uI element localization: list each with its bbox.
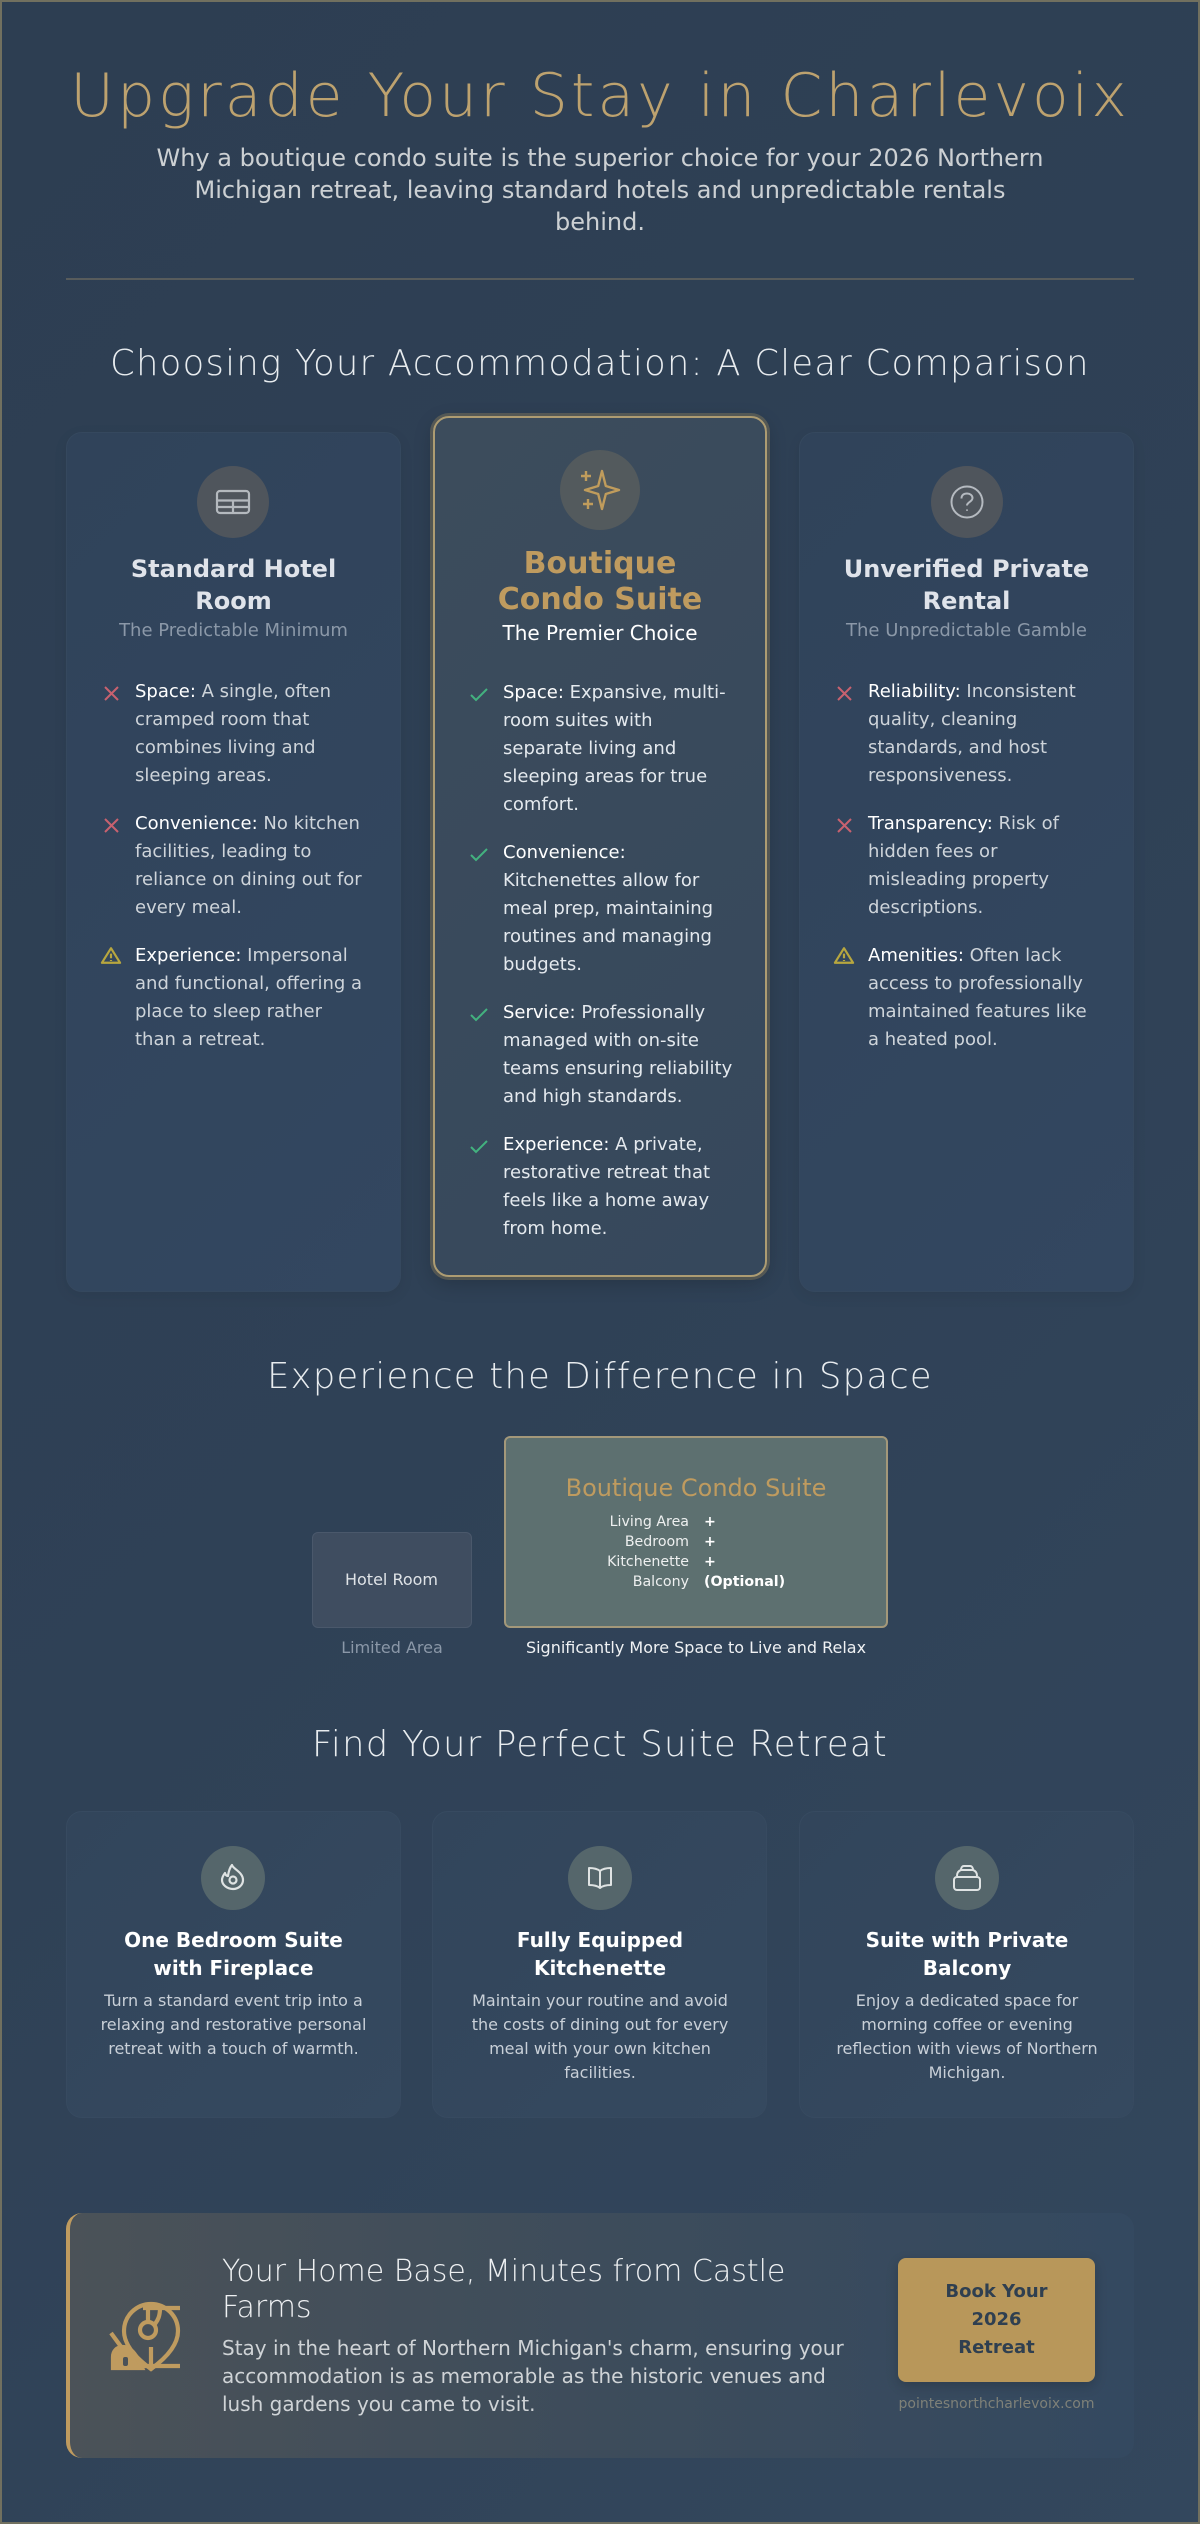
icon: balcony <box>935 1846 999 1910</box>
list item: experience <box>503 1134 710 1239</box>
website link: pointesnorthcharlevoix.com <box>899 2396 1094 2412</box>
suite description: Maintain your routine and avoid <box>472 1991 728 2010</box>
list item: space: sleeping areas. <box>135 765 272 786</box>
cta text: Stay in the heart of Northern Michigan's charm, ensuring your <box>222 2336 844 2360</box>
card subtitle: The Predictable Minimum <box>119 620 348 641</box>
suite description: Michigan. <box>929 2063 1005 2082</box>
suite title: Balcony <box>923 1956 1011 1980</box>
list item: transparency <box>868 813 1060 918</box>
list item: convenience: routines and managing <box>503 926 712 947</box>
list item: amenities <box>868 945 1087 1050</box>
suite title <box>866 1928 1068 1980</box>
panel: balcony suite <box>799 1811 1134 2118</box>
cta text: accommodation is as memorable as the historic venues and <box>222 2364 826 2388</box>
card subtitle: The Unpredictable Gamble <box>846 620 1087 641</box>
list item: service: and high standards. <box>503 1086 682 1107</box>
list item: convenience: Kitchenettes allow for <box>503 870 699 891</box>
list item: amenities: access to professionally <box>868 973 1083 994</box>
subtitle: Michigan retreat, leaving standard hotels and unpredictable rentals <box>195 176 1005 204</box>
cta text: lush gardens you came to visit. <box>222 2392 535 2416</box>
card title: Boutique <box>524 546 676 581</box>
room list: Kitchenette <box>607 1554 689 1570</box>
list item: convenience: budgets. <box>503 954 582 975</box>
icon: location <box>109 2302 180 2372</box>
room list: + <box>704 1514 716 1530</box>
list item: reliability: standards, and host <box>868 737 1047 758</box>
suite title <box>124 1928 343 1980</box>
icon: cross <box>104 686 119 701</box>
card title <box>844 555 1089 615</box>
suite description <box>836 1991 1098 2082</box>
suite description: Turn a standard event trip into a <box>104 1991 363 2010</box>
suite title: with Fireplace <box>153 1956 314 1980</box>
list item: reliability: Reliability: Inconsistent <box>868 681 1076 702</box>
room list: Balcony <box>633 1574 689 1590</box>
list item: service: managed with on-site <box>503 1030 699 1051</box>
icon: book <box>568 1846 632 1910</box>
card title: Rental <box>923 587 1010 615</box>
suite description: Enjoy a dedicated space for <box>856 1991 1078 2010</box>
list item: experience: and functional, offering a <box>135 973 362 994</box>
panel: unverified private rental <box>799 432 1134 1292</box>
icon: question <box>931 466 1003 538</box>
panel: call to action <box>66 2213 1134 2458</box>
suite title: One Bedroom Suite <box>124 1928 343 1952</box>
list item: reliability: responsiveness. <box>868 765 1012 786</box>
icon: check <box>470 688 488 702</box>
panel: fireplace suite <box>66 1811 401 2118</box>
button: Book Your <box>945 2281 1048 2302</box>
list item: space: Space: Expansive, multi- <box>503 682 726 703</box>
button: 2026 <box>971 2309 1022 2330</box>
list item: space: separate living and <box>503 738 676 759</box>
list item: space: combines living and <box>135 737 316 758</box>
label: boutique condo suite: Boutique Condo Suite <box>566 1474 826 1502</box>
room list <box>607 1514 785 1590</box>
list item: convenience <box>135 813 362 918</box>
card title: Condo Suite <box>498 582 702 617</box>
list item: service: teams ensuring reliability <box>503 1058 732 1079</box>
card title <box>498 546 702 617</box>
card title: Standard Hotel <box>131 555 336 583</box>
list item: transparency: descriptions. <box>868 897 983 918</box>
heading: suites: Find Your Perfect Suite Retreat <box>312 1724 888 1765</box>
subtitle: behind. <box>555 208 645 236</box>
list item: experience: than a retreat. <box>135 1029 265 1050</box>
icon: warning <box>100 947 122 964</box>
list item: convenience: facilities, leading to <box>135 841 311 862</box>
suite description: retreat with a touch of warmth. <box>108 2039 359 2058</box>
button <box>898 2258 1095 2382</box>
list item: amenities: maintained features like <box>868 1001 1087 1022</box>
panel: standard hotel room <box>66 432 401 1292</box>
list item: space: sleeping areas for true <box>503 766 707 787</box>
suite description: facilities. <box>564 2063 636 2082</box>
button: Retreat <box>958 2337 1035 2358</box>
suite description: morning coffee or evening <box>861 2015 1073 2034</box>
caption: more space: Significantly More Space to Live and Relax <box>526 1638 866 1657</box>
list item: experience: Experience: Impersonal <box>135 945 348 966</box>
card title <box>131 555 336 615</box>
list item: experience <box>135 945 362 1050</box>
panel: suite size <box>504 1436 888 1628</box>
list item: space: room suites with <box>503 710 652 731</box>
card title: Unverified Private <box>844 555 1089 583</box>
list item: space <box>503 682 726 815</box>
list item: space <box>135 681 331 786</box>
panel: boutique condo suite <box>433 416 767 1277</box>
panel: hotel room size <box>312 1532 472 1628</box>
icon: cross <box>837 818 852 833</box>
icon: hotel <box>197 466 269 538</box>
cta heading: Your Home Base, Minutes from Castle <box>222 2254 785 2289</box>
cta heading <box>222 2254 785 2325</box>
room list: Bedroom <box>625 1534 689 1550</box>
list item: experience: feels like a home away <box>503 1190 709 1211</box>
list item: amenities: Amenities: Often lack <box>868 945 1061 966</box>
room list: (Optional) <box>704 1574 785 1590</box>
heading: space: Experience the Difference in Space <box>267 1356 933 1397</box>
subtitle <box>156 144 1044 236</box>
list item: transparency: hidden fees or <box>868 841 997 862</box>
cta heading: Farms <box>222 2290 312 2325</box>
icon: flame <box>201 1846 265 1910</box>
room list: + <box>704 1554 716 1570</box>
list item: experience: place to sleep rather <box>135 1001 322 1022</box>
list item: convenience: Convenience: <box>503 842 626 863</box>
suite description: the costs of dining out for every <box>472 2015 728 2034</box>
icon: check <box>470 1008 488 1022</box>
icon: warning <box>834 947 854 964</box>
caption: limited area: Limited Area <box>341 1638 443 1657</box>
list item: reliability: quality, cleaning <box>868 709 1017 730</box>
list item: space: Space: A single, often <box>135 681 331 702</box>
list item: space: cramped room that <box>135 709 309 730</box>
suite description: meal with your own kitchen <box>489 2039 711 2058</box>
suite description: relaxing and restorative personal <box>101 2015 366 2034</box>
suite description <box>472 1991 728 2082</box>
list item: convenience: reliance on dining out for <box>135 869 362 890</box>
title: Upgrade Your Stay in Charlevoix <box>70 61 1130 131</box>
list item: service: Service: Professionally <box>503 1002 705 1023</box>
list item: convenience: every meal. <box>135 897 242 918</box>
cta text <box>222 2336 844 2416</box>
list item: experience: from home. <box>503 1218 607 1239</box>
panel: kitchenette <box>432 1811 767 2118</box>
icon: cross <box>104 818 119 833</box>
suite description: reflection with views of Northern <box>836 2039 1098 2058</box>
icon: check <box>470 848 488 862</box>
list item: convenience: Convenience: No kitchen <box>135 813 360 834</box>
room list: + <box>704 1534 716 1550</box>
suite title: Fully Equipped <box>517 1928 683 1952</box>
list item: convenience: meal prep, maintaining <box>503 898 713 919</box>
list item: transparency: misleading property <box>868 869 1049 890</box>
icon: cross <box>837 686 852 701</box>
list item: amenities: a heated pool. <box>868 1029 998 1050</box>
suite title: Suite with Private <box>866 1928 1068 1952</box>
card title: Room <box>195 587 272 615</box>
suite title <box>517 1928 683 1980</box>
list item: convenience <box>503 842 713 975</box>
suite title: Kitchenette <box>534 1956 666 1980</box>
card subtitle: The Premier Choice <box>502 621 698 645</box>
list item: experience: Experience: A private, <box>503 1134 703 1155</box>
suite description <box>101 1991 366 2058</box>
subtitle: Why a boutique condo suite is the superior choice for your 2026 Northern <box>156 144 1044 172</box>
list item: reliability <box>868 681 1076 786</box>
list item: experience: restorative retreat that <box>503 1162 710 1183</box>
label: hotel room: Hotel Room <box>345 1570 438 1589</box>
heading: comparison: Choosing Your Accommodation: A Clear Comparison <box>110 343 1090 384</box>
room list: Living Area <box>610 1514 689 1530</box>
icon: sparkles <box>560 450 640 530</box>
list item: service <box>503 1002 732 1107</box>
list item: space: comfort. <box>503 794 579 815</box>
list item: transparency: Transparency: Risk of <box>868 813 1059 834</box>
icon: check <box>470 1140 488 1154</box>
